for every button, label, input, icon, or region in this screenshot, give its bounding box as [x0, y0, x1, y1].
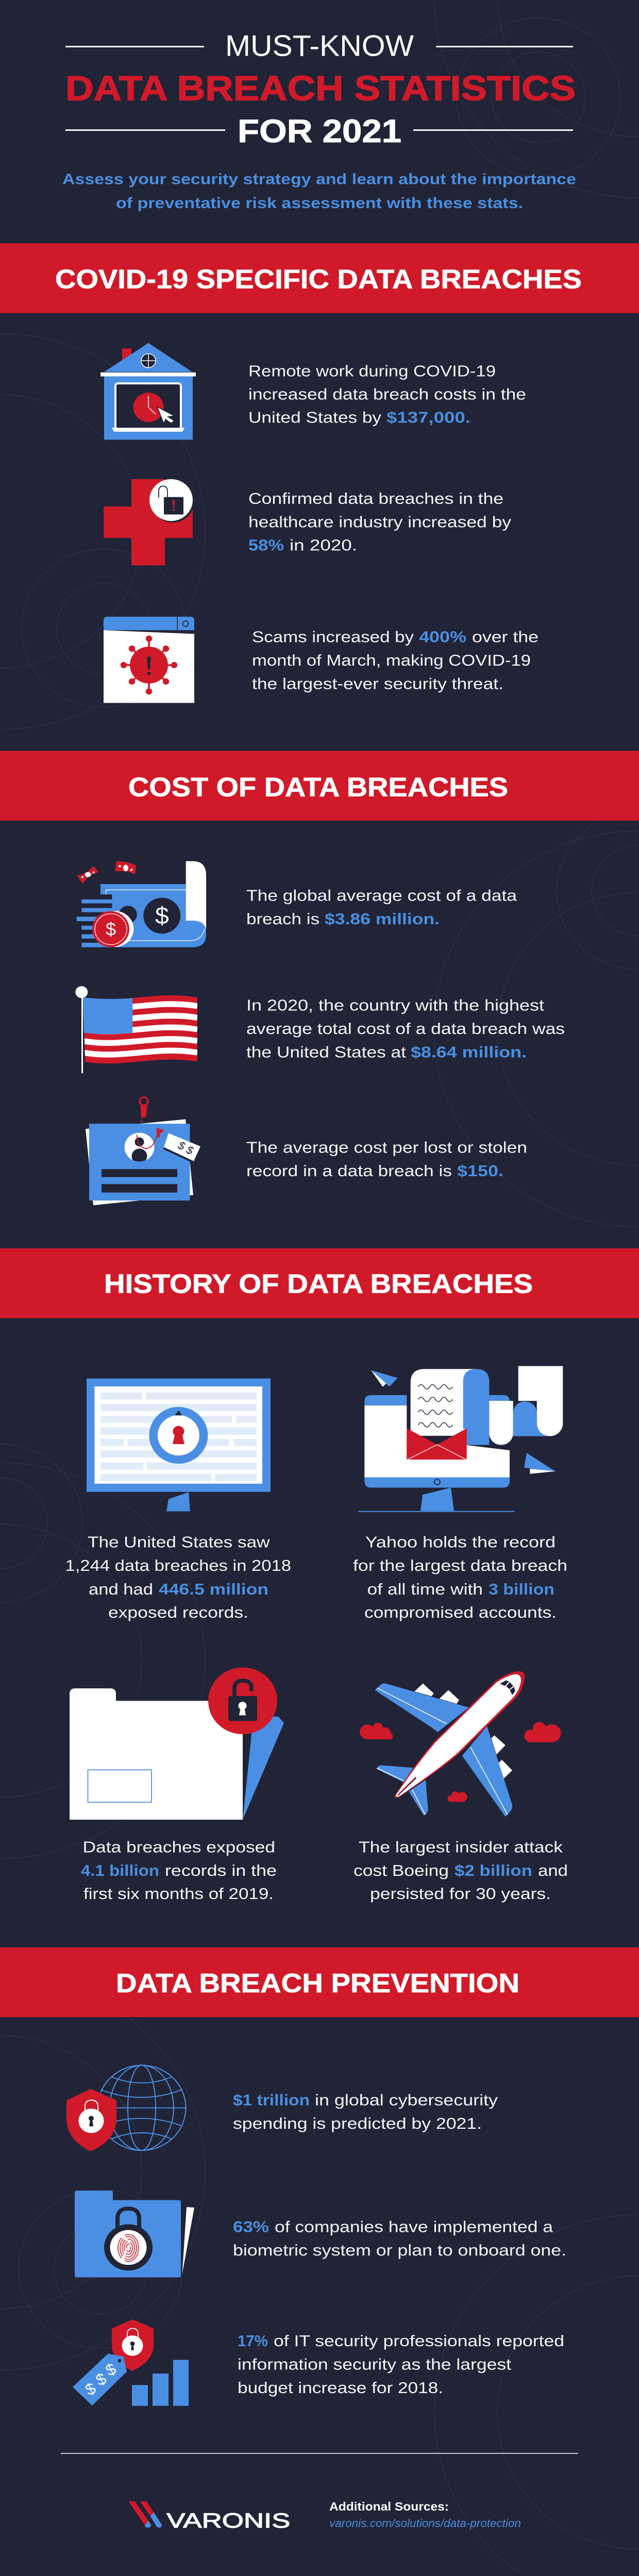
text: scams stat: month of March, making COVID-19 [252, 651, 531, 669]
text: budget increase stat [238, 2332, 564, 2397]
text: remote work stat: $137,000. [386, 409, 470, 426]
text: us breaches stat: and had [89, 1581, 153, 1598]
text: global average cost [246, 887, 517, 928]
text: global spending stat: in global cybersecurity [315, 2091, 498, 2109]
icon: monitor with keyhole [87, 1379, 271, 1512]
icon: id card with hook and price tag: $ [176, 1139, 187, 1153]
icon: id card with hook and price tag: $ [184, 1143, 195, 1157]
text: exposed records stat: first six months of 2019. [83, 1885, 274, 1903]
text: global average cost: breach is [246, 910, 320, 928]
text: cost per record [246, 1139, 527, 1180]
text: scams stat: 400% [419, 628, 466, 646]
text: additional sources [329, 2501, 521, 2530]
text: global spending stat: spending is predicted by 2021. [233, 2114, 482, 2132]
text: scams stat: the largest-ever security threat. [252, 675, 503, 692]
title: MUST-KNOW [225, 29, 414, 62]
banner heading: cost: COST OF DATA BREACHES [128, 772, 508, 802]
icon: medical cross with open lock [104, 479, 194, 565]
text: boeing stat [354, 1838, 568, 1903]
icon: browser with virus [104, 617, 194, 703]
text: biometric stat: biometric system or plan to onboard one. [233, 2241, 566, 2259]
text: highest country cost: $8.64 million. [411, 1043, 527, 1061]
title [65, 29, 576, 149]
title: FOR 2021 [238, 113, 401, 149]
text: scams stat [252, 628, 539, 692]
text: yahoo stat [353, 1533, 567, 1621]
icon: airplane and clouds [360, 1671, 561, 1817]
icon: money bill and coin: $ [155, 903, 169, 929]
icon: money bill and coin [77, 861, 206, 947]
text: yahoo stat: 3 billion [489, 1581, 554, 1598]
text: healthcare stat: healthcare industry increased by [248, 513, 511, 531]
text: yahoo stat: compromised accounts. [364, 1604, 557, 1621]
title: DATA BREACH STATISTICS [65, 69, 576, 108]
text: global spending stat: $1 trillion [233, 2091, 310, 2109]
text: us breaches stat [65, 1533, 291, 1621]
text: boeing stat: $2 billion [455, 1861, 532, 1879]
text: budget increase stat: budget increase for 2018. [238, 2379, 443, 2397]
text: budget increase stat: of IT security professionals reported [274, 2332, 564, 2350]
text: highest country cost [246, 996, 565, 1061]
icon: american flag [75, 986, 197, 1073]
banner heading: prevention: DATA BREACH PREVENTION [116, 1969, 519, 1998]
icon: house with laptop [100, 343, 196, 439]
icon: monitor with envelope and scroll [358, 1366, 563, 1512]
text: cost per record: record in a data breach is [246, 1162, 452, 1180]
text: highest country cost: average total cost of a data breach was [246, 1020, 565, 1038]
banner heading: history [0, 1248, 639, 1318]
panel: covid-19 specific data breaches [0, 243, 639, 703]
text: highest country cost: the United States at [246, 1043, 406, 1061]
text: additional sources: Additional Sources: [329, 2501, 449, 2514]
text: boeing stat: persisted for 30 years. [370, 1885, 551, 1903]
text: us breaches stat: 446.5 million [159, 1581, 268, 1598]
text: biometric stat: 63% [233, 2218, 269, 2235]
text: global average cost: The global average cost of a data [246, 887, 517, 904]
text: exposed records stat: 4.1 billion [81, 1861, 159, 1879]
text: healthcare stat [248, 489, 511, 554]
text: remote work stat: increased data breach costs in the [248, 385, 526, 403]
text: healthcare stat: in 2020. [290, 536, 357, 554]
text: us breaches stat: 1,244 data breaches in 2018 [65, 1557, 291, 1574]
icon: id card with hook and price tag [86, 1097, 200, 1205]
panel: cost of data breaches [0, 751, 639, 1205]
text: cost per record: $150. [457, 1162, 503, 1180]
text: additional sources: varonis.com/solutions/data-protection [329, 2517, 521, 2530]
banner heading: covid-19: COVID-19 SPECIFIC DATA BREACHES [55, 264, 582, 294]
icon: shield, price tag and bar chart [73, 2319, 189, 2406]
text: budget increase stat: information security as the largest [238, 2355, 511, 2373]
text: exposed records stat [81, 1838, 277, 1903]
text: boeing stat: cost Boeing [354, 1861, 449, 1879]
icon: shield, price tag and bar chart: $ [82, 2379, 98, 2399]
subtitle [62, 171, 576, 212]
text: global spending stat [233, 2091, 498, 2132]
subtitle: of preventative risk assessment with these stats. [116, 194, 523, 212]
text: scams stat: Scams increased by [252, 628, 414, 646]
text: biometric stat: of companies have implemented a [275, 2218, 553, 2235]
banner heading: prevention [0, 1947, 639, 2017]
text: us breaches stat: The United States saw [88, 1533, 270, 1551]
text: budget increase stat: 17% [238, 2332, 268, 2350]
text: remote work stat: Remote work during COVID-19 [248, 362, 496, 380]
text: exposed records stat: records in the [165, 1861, 277, 1879]
footer [128, 2501, 521, 2532]
text: yahoo stat: Yahoo holds the record [365, 1533, 556, 1551]
text: remote work stat: United States by [248, 409, 381, 426]
text: boeing stat: and [538, 1861, 568, 1879]
text: exposed records stat: Data breaches exposed [82, 1838, 275, 1856]
text: yahoo stat: of all time with [367, 1581, 483, 1598]
icon: shield, price tag and bar chart: $ [93, 2369, 109, 2389]
banner heading: covid-19 [0, 243, 639, 313]
text: highest country cost: In 2020, the country with the highest [246, 996, 544, 1014]
panel: data breach prevention [0, 1947, 639, 2406]
icon: globe with shield [66, 2065, 186, 2151]
icon: money bill and coin: $ [106, 919, 116, 939]
subtitle: Assess your security strategy and learn about the importance [62, 171, 576, 188]
panel: history of data breaches [0, 1248, 639, 1903]
logo: varonis: VARONIS [166, 2509, 290, 2532]
text: remote work stat [248, 362, 526, 426]
icon: folder with biometric lock [75, 2191, 194, 2277]
text: biometric stat [233, 2218, 566, 2259]
text: global average cost: $3.86 million. [325, 910, 440, 928]
text: healthcare stat: Confirmed data breaches in the [248, 489, 503, 507]
text: us breaches stat: exposed records. [108, 1604, 248, 1621]
icon: shield, price tag and bar chart: $ [103, 2360, 119, 2380]
text: boeing stat: The largest insider attack [359, 1838, 563, 1856]
text: scams stat: over the [472, 628, 539, 646]
text: cost per record: The average cost per lost or stolen [246, 1139, 527, 1156]
text: yahoo stat: for the largest data breach [353, 1557, 567, 1574]
text: healthcare stat: 58% [248, 536, 284, 554]
banner heading: cost [0, 751, 639, 821]
logo: varonis [128, 2501, 290, 2532]
icon: folder with open padlock [70, 1668, 284, 1820]
banner heading: history: HISTORY OF DATA BREACHES [104, 1269, 533, 1299]
